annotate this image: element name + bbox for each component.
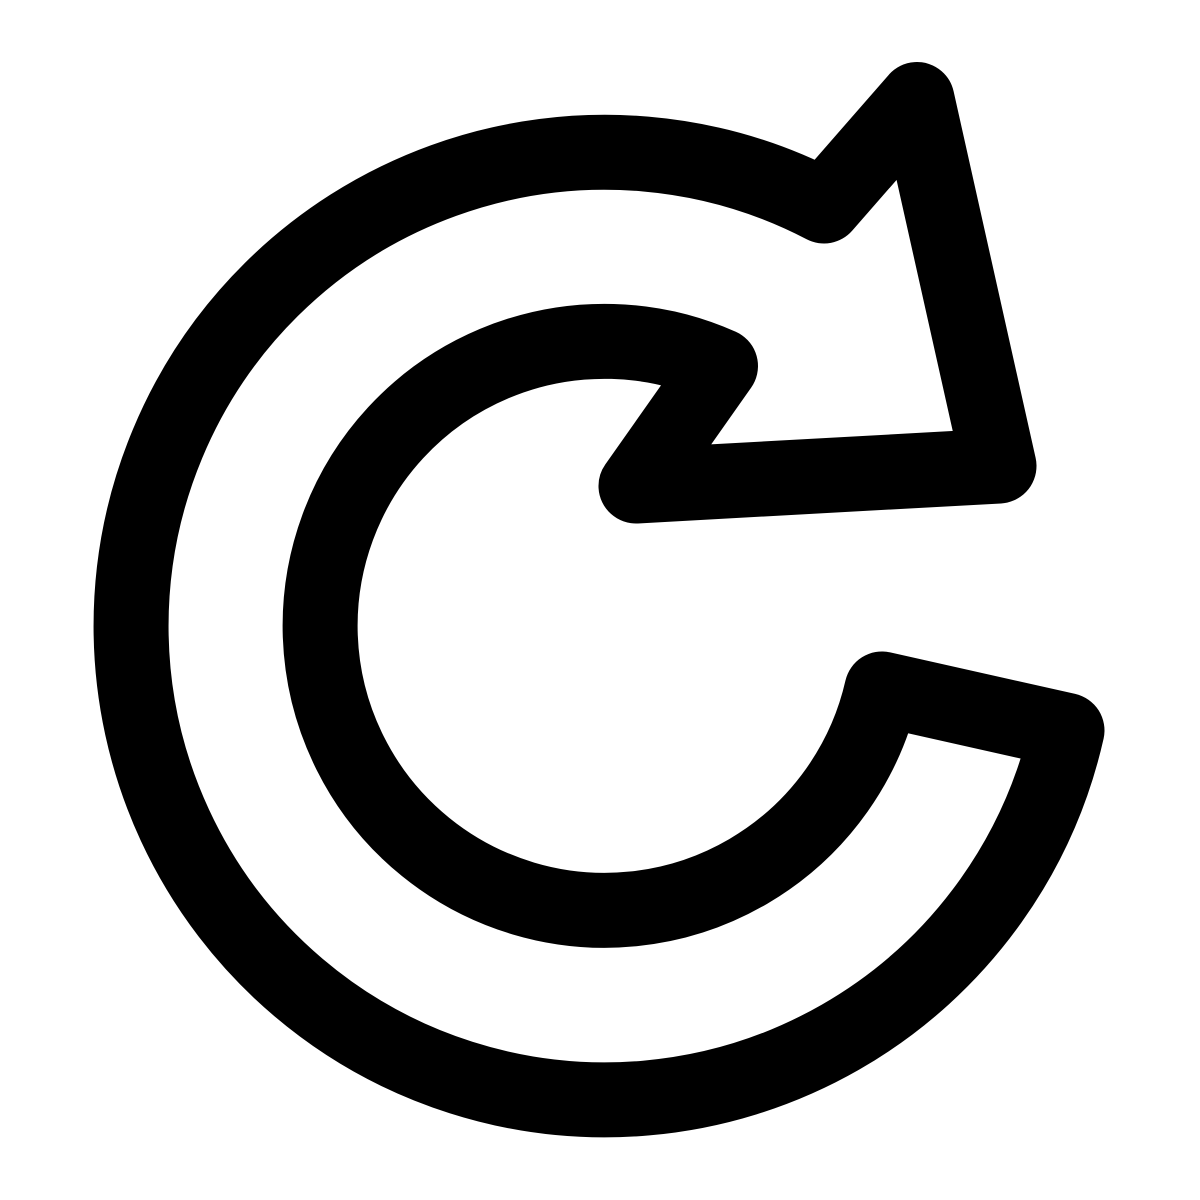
icon: circular redo arrow xyxy=(131,100,1067,1100)
